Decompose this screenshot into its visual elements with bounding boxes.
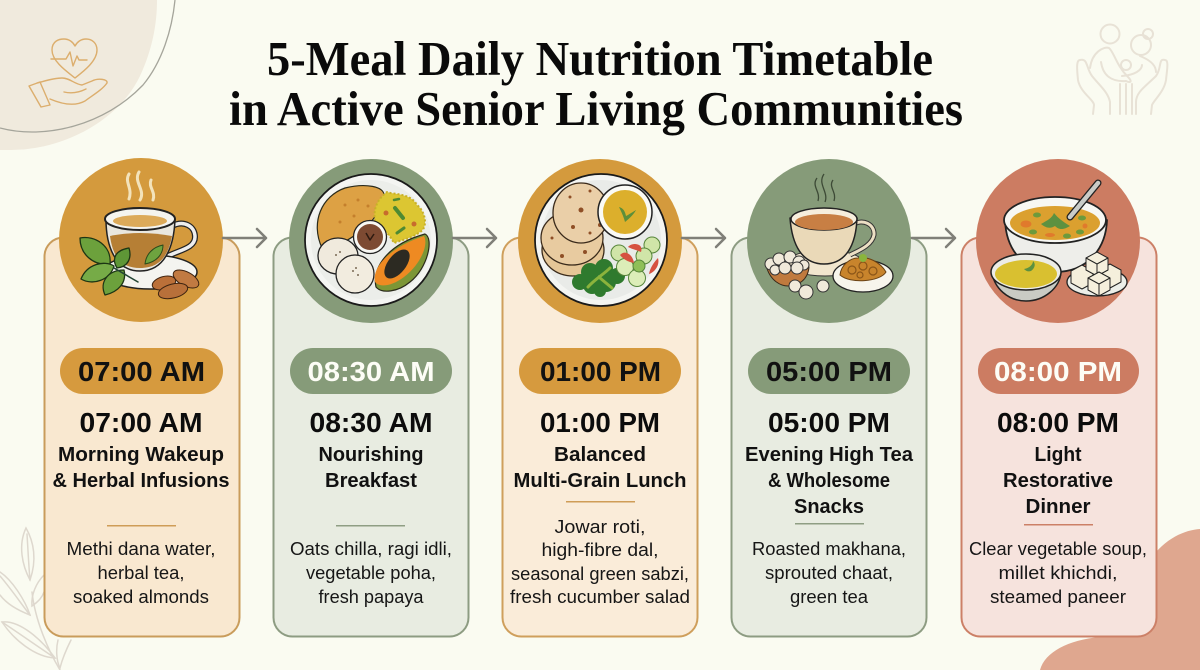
menu items: Clear vegetable soup, (969, 538, 1147, 559)
time badge (290, 348, 452, 394)
meal title: Snacks (794, 496, 864, 518)
time badge: 08:00 PM (994, 356, 1122, 387)
time heading: 01:00 PM (540, 407, 660, 438)
meal title: Balanced (554, 444, 646, 466)
panel: 05:00 PM high tea (732, 159, 926, 636)
menu items: sprouted chaat, (765, 562, 893, 583)
decorative corner circle: top left (0, 0, 175, 150)
meal image circle (518, 159, 682, 323)
time badge: 08:30 AM (308, 356, 434, 387)
menu items: Methi dana water, (66, 538, 216, 559)
title: 5-Meal Daily Nutrition Timetable (267, 31, 933, 86)
time badge (978, 348, 1139, 394)
card background (732, 238, 926, 636)
card background (44, 238, 240, 636)
meal title (514, 444, 686, 492)
arrow: step 2 to 3 (453, 229, 496, 247)
meal title: Breakfast (325, 470, 417, 492)
time heading: 08:00 PM (997, 407, 1119, 438)
decorative blob: bottom right (1040, 529, 1200, 670)
menu items: Roasted makhana, (752, 538, 906, 559)
panel: 01:00 PM lunch (502, 159, 698, 636)
menu items: vegetable poha, (306, 562, 436, 583)
meal title: Dinner (1026, 496, 1091, 518)
menu items (66, 538, 216, 607)
icon: tea with snacks (765, 174, 893, 299)
icon: heart in caring hand (29, 39, 107, 107)
menu items: fresh cucumber salad (510, 586, 690, 607)
time badge: 01:00 PM (540, 356, 661, 387)
title: in Active Senior Living Communities (229, 81, 963, 136)
menu items: millet khichdi, (998, 562, 1118, 583)
menu items: Oats chilla, ragi idli, (290, 538, 452, 559)
meal image circle (976, 159, 1140, 323)
panel: 08:00 PM dinner (962, 159, 1156, 636)
meal image circle (747, 159, 911, 323)
arrow: step 1 to 2 (223, 229, 266, 247)
decorative leaves: bottom left (0, 528, 71, 670)
time heading: 08:30 AM (310, 407, 432, 438)
time badge (519, 348, 681, 394)
panel: 07:00 AM morning wakeup (44, 158, 240, 636)
meal title (1003, 444, 1113, 518)
meal title: Restorative (1003, 470, 1113, 492)
arrow: step 3 to 4 (682, 229, 725, 247)
meal image circle (59, 158, 223, 322)
menu items (969, 538, 1147, 607)
title (229, 31, 963, 136)
menu items: seasonal green sabzi, (511, 563, 689, 584)
menu items: green tea (790, 586, 869, 607)
menu items (752, 538, 906, 607)
meal title: Light (1034, 444, 1082, 466)
menu items: herbal tea, (98, 562, 184, 583)
meal title: & Herbal Infusions (52, 470, 230, 492)
menu items: steamed paneer (990, 586, 1126, 607)
menu items: soaked almonds (73, 586, 209, 607)
meal title: Morning Wakeup (58, 444, 224, 466)
icon: lunch plate (535, 174, 667, 306)
meal title: Evening High Tea (745, 444, 914, 466)
menu items (510, 516, 690, 607)
card background (502, 238, 698, 636)
card background (962, 238, 1156, 636)
time badge (748, 348, 910, 394)
menu items: high-fibre dal, (542, 539, 658, 560)
panel: 08:30 AM breakfast (274, 159, 468, 636)
time heading: 05:00 PM (768, 407, 890, 438)
meal title: Multi-Grain Lunch (514, 470, 686, 492)
arrow: step 4 to 5 (912, 229, 955, 247)
time badge: 07:00 AM (78, 356, 205, 387)
meal image circle (289, 159, 453, 323)
meal title: Nourishing (318, 444, 424, 466)
menu items: Jowar roti, (554, 516, 646, 537)
meal title (745, 444, 914, 518)
icon: soup, khichdi and paneer (991, 183, 1127, 301)
meal title (52, 444, 230, 492)
card background (274, 238, 468, 636)
menu items: fresh papaya (318, 586, 424, 607)
icon: family in caring hands (1077, 24, 1167, 114)
time badge (60, 348, 223, 394)
menu items (290, 538, 452, 607)
meal title (318, 444, 424, 492)
time heading: 07:00 AM (80, 407, 202, 438)
time badge: 05:00 PM (766, 356, 892, 387)
meal title: & Wholesome (768, 470, 890, 492)
icon: breakfast plate (305, 174, 437, 306)
icon: herbal tea and almonds (80, 172, 202, 301)
